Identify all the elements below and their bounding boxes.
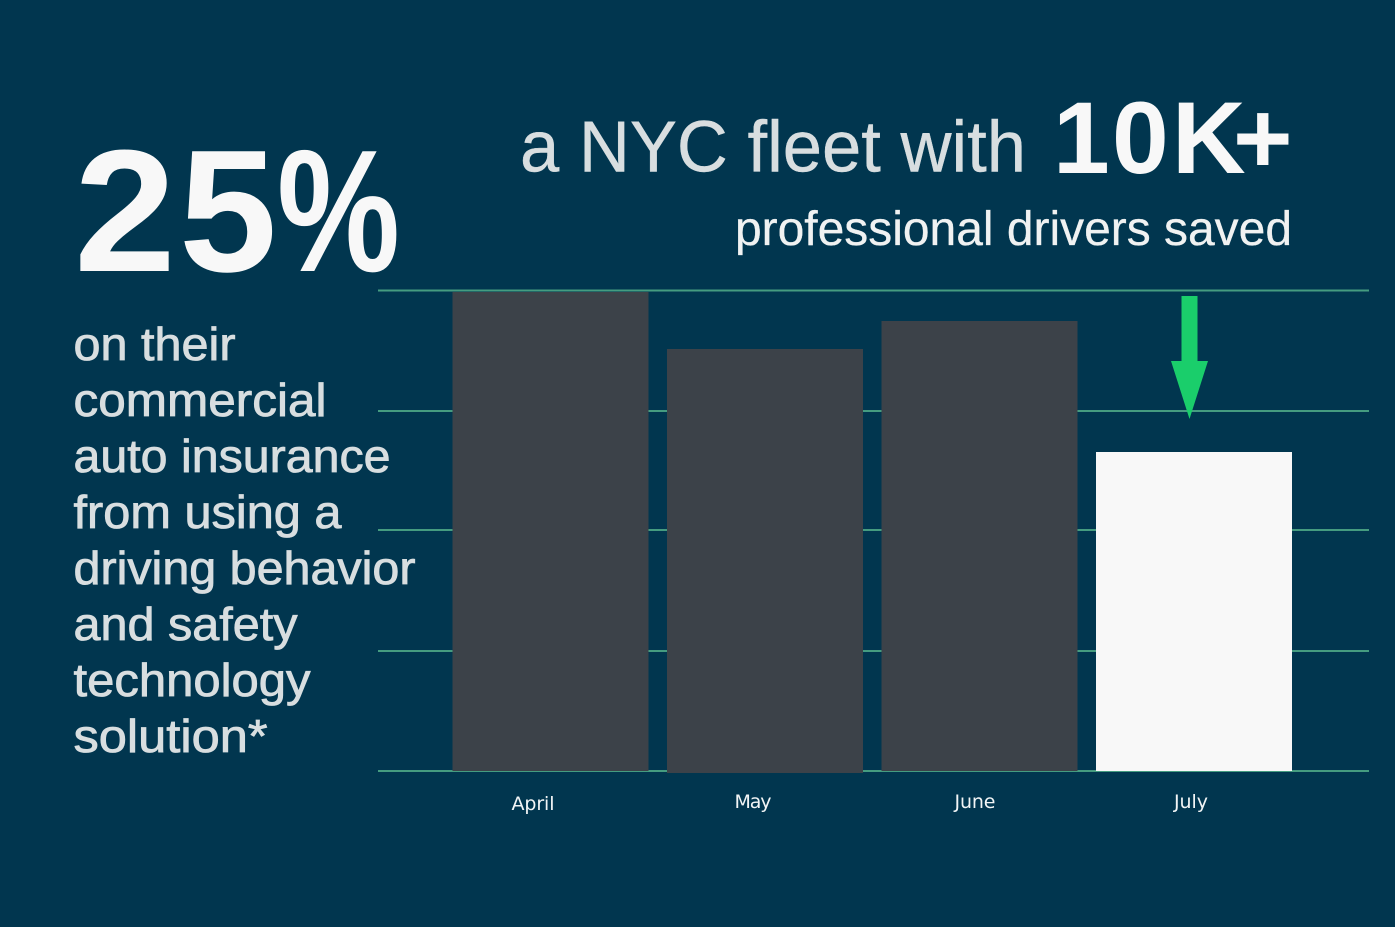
big statistic: 25%: % [277, 113, 400, 308]
text block: savings description: solution* [74, 710, 268, 762]
axis label: May: May [734, 791, 772, 813]
text block: savings description: commercial [74, 374, 326, 426]
text block: savings description: technology [74, 654, 310, 706]
axis label: July: July [1173, 791, 1208, 813]
axis label: April: April [512, 793, 554, 815]
big statistic: 25%: 5 [179, 113, 277, 308]
text block: savings description: from using a [74, 486, 342, 538]
bar: April [452, 292, 648, 771]
big statistic: 25% [74, 113, 400, 308]
bar: June [882, 321, 1078, 771]
bar: May [667, 349, 863, 773]
text block: savings description: and safety [74, 598, 298, 650]
text block: savings description: auto insurance [74, 430, 391, 482]
heading: fleet description: professional drivers saved [735, 203, 1292, 256]
text block: savings description [74, 318, 416, 762]
arrow: downward green [1171, 296, 1208, 419]
heading: fleet description [520, 81, 1293, 256]
text block: savings description: on their [74, 318, 236, 370]
text block: savings description: driving behavior [74, 542, 416, 594]
axis label: June: June [954, 791, 996, 813]
bar chart [378, 290, 1369, 815]
heading: fleet description: a NYC fleet with [520, 108, 1026, 188]
heading: fleet description: 10K+ [1053, 81, 1293, 195]
big statistic: 25%: 2 [74, 113, 176, 308]
bar: July [1096, 452, 1292, 771]
